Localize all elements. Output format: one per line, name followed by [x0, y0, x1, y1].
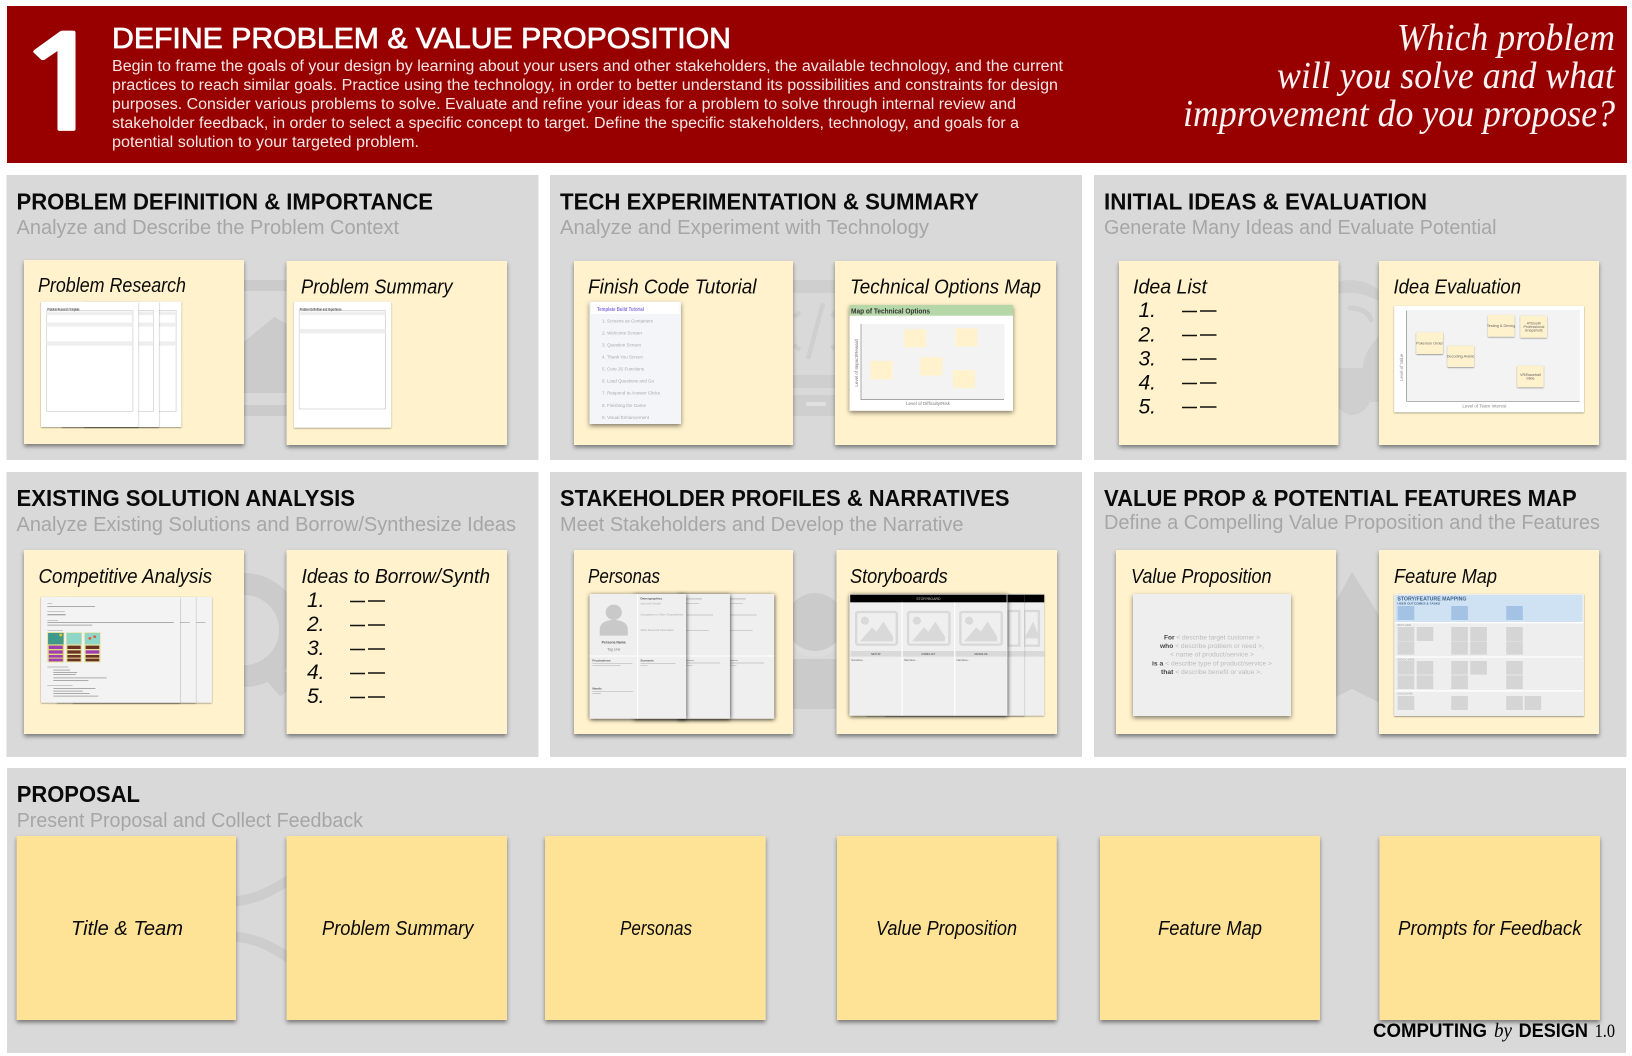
tutorial menu screenshot: 3. Question Screen — [602, 343, 641, 348]
slide: value proposition — [837, 836, 1057, 1020]
storyboard sheet stack: STORYBOARD — [916, 597, 941, 601]
subheading: Analyze and Experiment with Technology — [560, 217, 929, 239]
note: storyboards: Storyboards — [850, 565, 948, 588]
slide: title and team: Title & Team — [71, 917, 183, 940]
brand mark: by — [1494, 1020, 1512, 1042]
panel: initial ideas — [1094, 175, 1626, 460]
brand mark: 1.0 — [1595, 1021, 1615, 1042]
note: competitive analysis: Competitive Analysis — [38, 565, 212, 588]
map of technical options chart: Level of Difficulty/Risk — [906, 401, 951, 406]
slide: personas — [545, 836, 766, 1020]
heading: STAKEHOLDER PROFILES & NARRATIVES — [560, 485, 1010, 511]
story feature mapping grid — [1394, 594, 1584, 716]
description — [112, 58, 1064, 151]
note: finish code tutorial: Finish Code Tutorial — [588, 276, 758, 298]
note: idea evaluation: Idea Evaluation — [1394, 276, 1521, 298]
slide: problem summary: Problem Summary — [322, 917, 475, 940]
slide: title and team — [17, 836, 236, 1020]
idea evaluation chart: VR/Baseball — [1520, 373, 1541, 377]
idea evaluation chart: ATBooth — [1527, 322, 1541, 326]
persona sheet stack: Occupation or Other Characteristic — [640, 613, 684, 617]
story feature mapping grid: COULD HAVE — [1397, 693, 1413, 696]
numbered list: 2. — [306, 613, 324, 636]
heading: PROPOSAL — [17, 781, 140, 807]
document stack — [41, 302, 181, 427]
numbered list: 4. — [307, 661, 324, 684]
note: technical options map — [835, 261, 1056, 445]
watermark: mountain icon — [1330, 572, 1380, 703]
slide: feature map — [1100, 836, 1320, 1020]
tutorial menu screenshot: 1. Screens as Containers — [602, 319, 654, 324]
tutorial menu screenshot: 4. Thank You Screen — [602, 355, 643, 360]
persona sheet stack: Demographics — [640, 596, 663, 600]
slide: personas: Personas — [620, 917, 692, 940]
numbered list: 4. — [1138, 372, 1156, 394]
note: value proposition — [1116, 550, 1336, 734]
story feature mapping grid: USER OUTCOMES & TASKS — [1397, 601, 1440, 605]
storyboard sheet stack: CONFLICT — [921, 652, 936, 656]
idea evaluation chart: Level of Team Interest — [1462, 403, 1507, 408]
brand mark — [1373, 1020, 1615, 1042]
panel: existing solution analysis — [6, 472, 538, 757]
numbered list: 5. — [1138, 396, 1156, 418]
idea evaluation chart: Decoding Arabic — [1447, 354, 1475, 358]
idea evaluation chart: Testing & Driving — [1487, 324, 1515, 328]
persona sheet stack: Tag Line — [607, 647, 620, 651]
panel: proposal — [7, 768, 1626, 1053]
subheading: Meet Stakeholders and Develop the Narrative — [560, 514, 964, 536]
document stack — [41, 597, 212, 703]
value proposition template: that < describe benefit or value >. — [1161, 669, 1262, 676]
persona sheet stack: Frustrations — [592, 658, 611, 662]
note: ideas to borrow — [287, 550, 507, 734]
slide: problem summary — [286, 836, 507, 1020]
note: idea list — [1119, 261, 1338, 445]
watermark: magnifier icon — [198, 584, 290, 690]
title: DEFINE PROBLEM & VALUE PROPOSITION — [112, 23, 731, 55]
tutorial menu screenshot — [590, 302, 681, 424]
numbered list: 2. — [1137, 324, 1156, 346]
heading: INITIAL IDEAS & EVALUATION — [1104, 188, 1427, 214]
watermark: connection curves — [230, 878, 292, 960]
description: Begin to frame the goals of your design by learning about your users and other stakeholders, the available technology, and the current — [112, 58, 1064, 75]
note: finish code tutorial — [574, 261, 793, 445]
numbered list: 3. — [307, 637, 324, 660]
storyboard sheet stack: SETUP — [871, 652, 881, 656]
brand mark: COMPUTING — [1373, 1021, 1487, 1042]
note: personas — [574, 550, 793, 734]
map of technical options chart: Level of Impact/Reward — [854, 339, 859, 387]
slide: feature map: Feature Map — [1158, 917, 1262, 940]
guiding question — [1183, 17, 1616, 135]
idea evaluation chart: Slide — [1526, 377, 1535, 381]
tutorial menu screenshot: 2. Welcome Screen — [602, 331, 642, 336]
app screenshots — [47, 632, 101, 662]
note: storyboards — [836, 550, 1057, 734]
note: problem summary — [287, 261, 507, 445]
panel: tech experimentation — [550, 175, 1082, 460]
value proposition template: For < describe target customer > — [1164, 634, 1260, 642]
numbered list: 5. — [307, 685, 324, 708]
numbered list — [1137, 299, 1216, 418]
numbered list: 1. — [307, 589, 324, 612]
slide: prompts for feedback: Prompts for Feedback — [1398, 917, 1583, 940]
heading: EXISTING SOLUTION ANALYSIS — [16, 485, 355, 511]
tutorial menu screenshot: 6. Load Questions and Go — [602, 379, 654, 384]
watermark: home icon — [200, 280, 350, 416]
idea evaluation chart: Professional — [1523, 325, 1544, 329]
document: Problem Definition and Importance — [300, 307, 342, 311]
persona avatar — [600, 605, 628, 636]
note: idea list: Idea List — [1133, 276, 1208, 298]
storyboard sheet stack: Narrative... — [956, 658, 970, 662]
idea evaluation chart: Level of Value — [1399, 353, 1404, 381]
note: problem research — [24, 260, 244, 444]
panel: stakeholder profiles — [550, 472, 1082, 757]
note: problem research: Problem Research — [38, 274, 186, 297]
persona sheet stack: Other Relevant Information — [640, 628, 674, 632]
description: potential solution to your targeted problem. — [112, 134, 419, 151]
subheading: Present Proposal and Collect Feedback — [17, 810, 364, 832]
tutorial menu screenshot: 5. Core JS Functions — [602, 367, 645, 372]
step number: 1 — [12, 19, 114, 151]
slide: value proposition: Value Proposition — [876, 917, 1017, 940]
guiding question: Which problem — [1397, 17, 1615, 59]
watermark: code window icon — [780, 280, 850, 416]
description: practices to reach similar goals. Practice using the technology, in order to better understand its possibilities and constraints for design — [112, 77, 1058, 94]
value proposition template — [1133, 594, 1291, 716]
watermark: person icon — [780, 593, 850, 709]
map of technical options chart — [850, 305, 1013, 411]
map of technical options chart: Map of Technical Options — [851, 308, 930, 316]
document text lines — [47, 603, 174, 697]
subheading: Generate Many Ideas and Evaluate Potential — [1104, 217, 1496, 239]
storyboard sheet stack — [849, 594, 1044, 716]
tutorial menu screenshot: Template Build Tutorial — [597, 307, 645, 313]
value proposition template: is a < describe type of product/service > — [1152, 660, 1272, 667]
persona sheet stack: Age and Gender — [640, 601, 661, 605]
story feature mapping grid: MUST HAVE — [1397, 624, 1412, 627]
note: feature map — [1379, 550, 1599, 734]
persona sheet stack: Persona Name — [602, 641, 626, 645]
idea evaluation chart — [1394, 306, 1584, 412]
note: personas: Personas — [588, 565, 660, 588]
tutorial menu screenshot: 9. Visual Enhancement — [602, 415, 650, 420]
panel: problem definition — [6, 175, 538, 460]
heading: PROBLEM DEFINITION & IMPORTANCE — [16, 188, 433, 214]
numbered list — [306, 589, 385, 708]
persona sheet stack — [590, 594, 774, 719]
idea evaluation chart: Pokemon Order — [1416, 342, 1444, 346]
note: value proposition: Value Proposition — [1131, 565, 1272, 588]
subheading: Define a Compelling Value Proposition and the Features — [1104, 512, 1600, 534]
persona sheet stack: Needs — [592, 686, 602, 690]
document — [294, 302, 391, 428]
watermark: lightbulb icon — [1336, 280, 1382, 415]
numbered list: 3. — [1138, 348, 1156, 370]
tutorial menu screenshot: 8. Finishing the Game — [602, 403, 646, 408]
note: idea evaluation — [1379, 261, 1599, 445]
description: purposes. Consider various problems to solve. Evaluate and refine your ideas for a problem to solve through internal review and — [112, 96, 1016, 113]
document stack: Problem Research Template — [47, 307, 80, 311]
guiding question: improvement do you propose? — [1183, 93, 1615, 135]
storyboard sheet stack: RESOLVE — [974, 652, 988, 656]
value proposition template: who < describe problem or need >, — [1159, 643, 1264, 650]
description: stakeholder feedback, in order to select a specific concept to target. Define the specific stakeholders, technology, and goals for a — [112, 115, 1019, 132]
note: competitive analysis — [24, 550, 244, 734]
image placeholders — [856, 612, 1002, 645]
brand mark: DESIGN — [1519, 1021, 1588, 1042]
value proposition template: < name of product/service > — [1170, 652, 1254, 659]
subheading: Analyze and Describe the Problem Context — [16, 217, 399, 239]
storyboard sheet stack: Narrative... — [904, 658, 918, 662]
idea evaluation chart: Snapshots — [1525, 328, 1543, 332]
storyboard sheet stack: Narrative... — [851, 658, 865, 662]
story feature mapping grid: STORY/FEATURE MAPPING — [1397, 596, 1467, 602]
header banner — [7, 6, 1627, 163]
note: problem summary: Problem Summary — [301, 276, 454, 298]
note: ideas to borrow: Ideas to Borrow/Synth — [302, 565, 490, 588]
slide: prompts for feedback — [1380, 836, 1600, 1020]
note: feature map: Feature Map — [1394, 565, 1497, 588]
note: technical options map: Technical Options Map — [850, 276, 1041, 298]
story feature mapping grid: SHOULD HAVE — [1397, 658, 1415, 661]
heading: TECH EXPERIMENTATION & SUMMARY — [560, 188, 979, 214]
guiding question: will you solve and what — [1277, 55, 1616, 97]
heading: VALUE PROP & POTENTIAL FEATURES MAP — [1104, 485, 1577, 511]
numbered list: 1. — [1138, 299, 1156, 322]
panel: value prop and features — [1094, 472, 1626, 757]
persona sheet stack: Scenario — [640, 658, 654, 662]
subheading: Analyze Existing Solutions and Borrow/Synthesize Ideas — [16, 514, 516, 536]
tutorial menu screenshot: 7. Respond to Answer Clicks — [602, 391, 661, 396]
